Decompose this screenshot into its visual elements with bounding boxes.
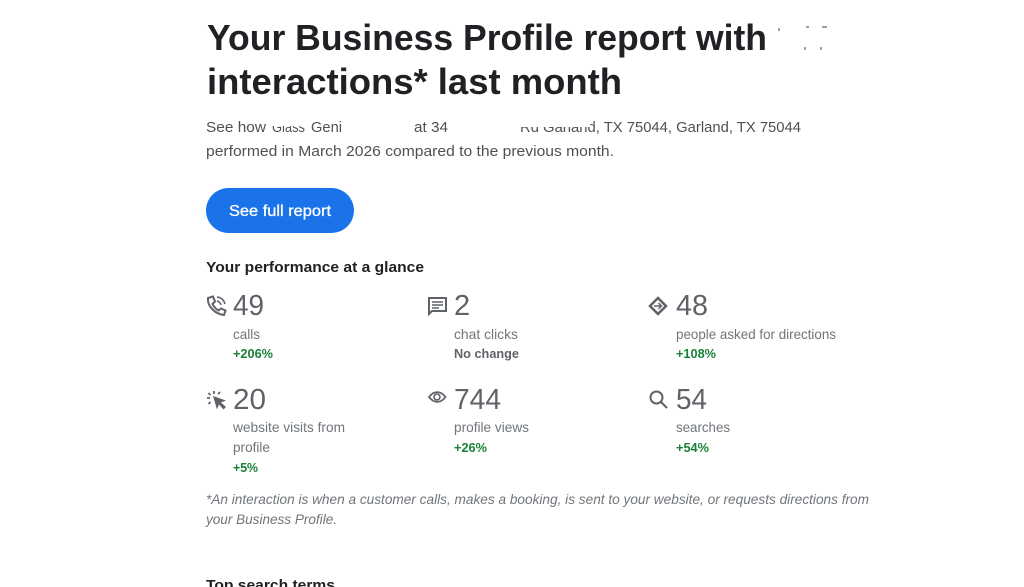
intro text: at 34 xyxy=(414,120,448,136)
intro text: See how xyxy=(206,120,267,136)
intro text xyxy=(206,120,801,160)
metric: directions: 48 xyxy=(676,290,708,322)
metric: website visits: website visits from xyxy=(232,419,345,435)
metric: directions: +108% xyxy=(676,347,716,361)
icon: phone xyxy=(208,296,226,315)
intro text: Glass xyxy=(272,120,305,136)
metric: website visits: +5% xyxy=(233,461,258,475)
metric: calls: calls xyxy=(233,326,260,342)
title xyxy=(207,17,767,102)
metric: calls xyxy=(208,290,273,361)
button: see full report: See full report xyxy=(229,203,332,220)
metric: directions: people asked for directions xyxy=(676,326,836,342)
intro text: performed in March 2026 compared to the previous month. xyxy=(206,144,614,160)
intro text: Geni xyxy=(311,120,342,136)
metric: searches: searches xyxy=(676,419,730,435)
metric: profile views: profile views xyxy=(454,419,529,435)
redacted number specks xyxy=(778,26,827,50)
button: see full report xyxy=(206,188,354,233)
metric: website visits xyxy=(207,384,345,475)
metric: website visits: 20 xyxy=(233,384,266,416)
icon: chat xyxy=(429,298,446,314)
metric: searches: 54 xyxy=(676,384,707,416)
metric: calls: 49 xyxy=(233,290,264,322)
heading: performance at a glance: Your performance at a glance xyxy=(206,260,424,276)
metric: directions xyxy=(650,290,836,361)
metric: searches: +54% xyxy=(676,441,709,455)
metric: profile views: 744 xyxy=(454,384,501,416)
metric: searches xyxy=(650,384,730,455)
footnote: your Business Profile. xyxy=(205,512,337,527)
metric: chat clicks: 2 xyxy=(454,290,470,322)
icon: eye xyxy=(429,392,446,402)
title: interactions* last month xyxy=(207,61,622,102)
icon: magnifier xyxy=(650,392,667,408)
metric: chat clicks: chat clicks xyxy=(454,326,518,342)
metric: calls: +206% xyxy=(233,347,273,361)
metric: website visits: profile xyxy=(233,439,270,455)
footnote xyxy=(205,492,869,527)
intro text: Rd Garland, TX 75044, Garland, TX 75044 xyxy=(520,120,801,136)
metric: chat clicks: No change xyxy=(454,347,519,361)
metric: profile views xyxy=(429,384,529,455)
icon: directions xyxy=(650,298,666,314)
icon: cursor click xyxy=(207,391,226,410)
title: Your Business Profile report with xyxy=(207,17,767,58)
metric: profile views: +26% xyxy=(454,441,487,455)
metric: chat clicks xyxy=(429,290,519,361)
footnote: *An interaction is when a customer calls, makes a booking, is sent to your website, or requests directions from xyxy=(206,492,869,507)
redaction patches xyxy=(270,118,590,127)
